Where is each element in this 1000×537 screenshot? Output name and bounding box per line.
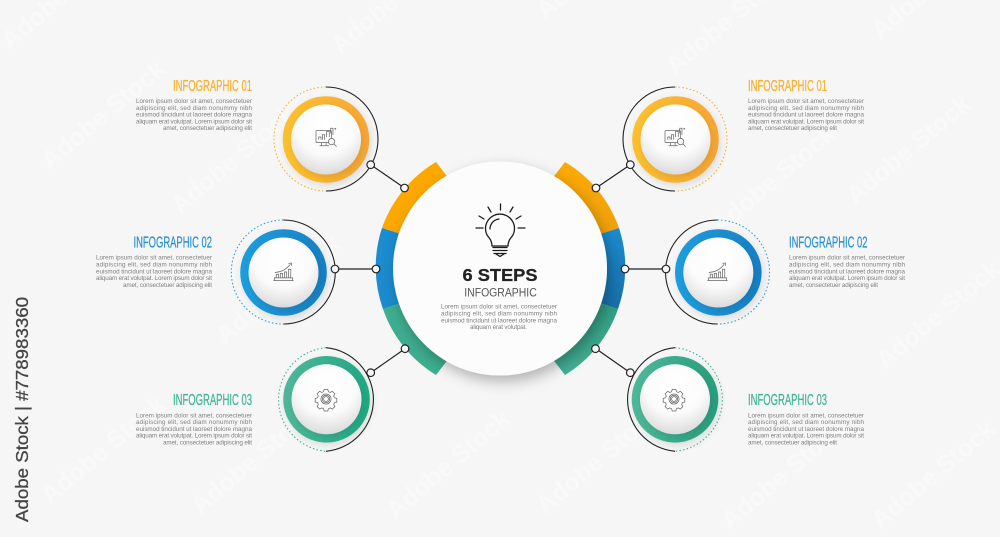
step: top left — [274, 87, 378, 191]
body text: bottom right: euismod tincidunt ut laoreet dolore magna — [748, 426, 864, 433]
watermark pattern: Adobe Stock — [531, 400, 666, 520]
body text: top right — [748, 98, 864, 132]
dotted arc — [279, 348, 326, 451]
watermark pattern: Adobe Stock — [841, 90, 976, 210]
body text: middle left: adipiscing elit, sed diam nonummy nibh — [96, 262, 212, 268]
connectors — [335, 165, 666, 373]
body text: bottom left: amet, consectetuer adipiscing elit — [163, 440, 252, 446]
ring segment: green right — [534, 297, 618, 375]
body text: middle left: Lorem ipsum dolor sit amet, consectetuer — [96, 255, 212, 262]
icon: monitor chart — [316, 128, 337, 147]
color ring — [283, 96, 369, 183]
body text: top left — [136, 98, 252, 132]
color ring — [240, 229, 327, 316]
title: top left: INFOGRAPHIC 01 — [173, 78, 252, 95]
title: middle left: INFOGRAPHIC 02 — [134, 234, 212, 252]
dotted arc — [718, 220, 770, 324]
body text: bottom left: Lorem ipsum dolor sit amet, consectetuer — [136, 412, 252, 419]
outline arc — [623, 87, 675, 191]
step: middle left — [231, 220, 335, 324]
outline arc — [326, 348, 373, 451]
color ring — [632, 356, 718, 443]
subheading: infographic: INFOGRAPHIC — [464, 288, 537, 300]
body text: top left: amet, consectetuer adipiscing elit — [163, 125, 252, 132]
dotted arc — [274, 87, 326, 191]
body text: middle left: aliquam erat volutpat. Lorem ipsum dolor sit — [96, 275, 212, 282]
outline arc — [628, 348, 675, 451]
body text: middle right — [789, 255, 905, 289]
body text: middle left: amet, consectetuer adipiscing elit — [123, 282, 212, 289]
body text: middle right: euismod tincidunt ut laoreet dolore magna — [789, 268, 905, 275]
title: top right: INFOGRAPHIC 01 — [748, 78, 827, 95]
white disc — [683, 238, 753, 308]
watermark pattern: Adobe Stock — [166, 100, 301, 220]
center body text: Lorem ipsum dolor sit amet, consectetuer — [441, 304, 557, 311]
watermark pattern: Adobe Stock — [716, 415, 851, 535]
outline arc — [666, 220, 718, 324]
title: middle right: INFOGRAPHIC 02 — [789, 234, 868, 252]
icon: growth chart — [274, 263, 294, 281]
dotted arc — [675, 87, 727, 191]
center circle — [393, 162, 607, 376]
body text: top right: adipiscing elit, sed diam nonummy nibh — [748, 105, 864, 112]
ring segment: green left — [383, 297, 467, 375]
title: bottom left: INFOGRAPHIC 03 — [173, 392, 252, 409]
watermark pattern: Adobe Stock — [36, 390, 171, 510]
white disc — [292, 364, 362, 434]
center body text: adipiscing elit, sed diam nonummy nibh — [441, 310, 557, 318]
icon: gear — [663, 389, 685, 411]
body text: top right: amet, consectetuer adipiscing elit — [748, 125, 837, 132]
body text: bottom right: aliquam erat volutpat. Lorem ipsum dolor sit — [748, 433, 864, 440]
body text: middle right: amet, consectetuer adipiscing elit — [789, 282, 878, 289]
connector nodes — [331, 161, 670, 377]
outline arc — [283, 220, 335, 324]
body text: middle right: Lorem ipsum dolor sit amet, consectetuer — [789, 255, 905, 262]
body text: middle right: adipiscing elit, sed diam nonummy nibh — [789, 262, 905, 268]
body text: bottom left: euismod tincidunt ut laoreet dolore magna — [136, 426, 252, 433]
dotted arc — [675, 348, 722, 451]
white disc — [248, 238, 318, 308]
body text: middle left: euismod tincidunt ut laoreet dolore magna — [96, 268, 212, 275]
watermark pattern: Adobe Stock — [381, 405, 516, 525]
body text: bottom left: aliquam erat volutpat. Lorem ipsum dolor sit — [136, 433, 252, 440]
body text: bottom right: amet, consectetuer adipiscing elit — [748, 440, 837, 446]
white disc — [640, 104, 710, 174]
watermark pattern: Adobe Stock — [186, 400, 321, 520]
ring segment: orange right — [534, 162, 619, 240]
watermark pattern: Adobe Stock — [866, 415, 1000, 535]
body text: top left: Lorem ipsum dolor sit amet, consectetuer — [136, 98, 252, 105]
body text: top right: aliquam erat volutpat. Lorem ipsum dolor sit — [748, 118, 864, 125]
vertical stock id: Adobe Stock | #778983360 — [12, 297, 32, 522]
color ring — [632, 96, 719, 183]
body text: top left: adipiscing elit, sed diam nonummy nibh — [136, 105, 252, 112]
body text: bottom right — [748, 412, 864, 446]
body text: bottom left — [136, 412, 252, 446]
white disc — [291, 104, 361, 174]
ring segment: blue left — [376, 228, 420, 309]
step: bottom left — [279, 348, 373, 451]
outline arc — [326, 87, 378, 191]
body text: bottom left: adipiscing elit, sed diam nonummy nibh — [136, 419, 252, 426]
dotted arc — [231, 220, 283, 324]
body text: top right: Lorem ipsum dolor sit amet, consectetuer — [748, 98, 864, 105]
body text: top left: aliquam erat volutpat. Lorem ipsum dolor sit — [136, 118, 252, 125]
heading: 6 steps: 6 STEPS — [462, 265, 538, 285]
body text: top left: euismod tincidunt ut laoreet dolore magna — [136, 112, 252, 119]
ring segment: orange left — [382, 162, 467, 240]
body text: bottom right: Lorem ipsum dolor sit amet, consectetuer — [748, 412, 864, 419]
title: bottom right: INFOGRAPHIC 03 — [748, 392, 827, 409]
watermark pattern: Adobe Stock — [706, 120, 841, 240]
white disc — [640, 364, 710, 434]
body text: bottom right: adipiscing elit, sed diam nonummy nibh — [748, 419, 864, 426]
central segmented ring — [376, 162, 625, 375]
step: bottom right — [628, 348, 722, 451]
body text: top right: euismod tincidunt ut laoreet dolore magna — [748, 112, 864, 119]
icon: gear — [315, 389, 337, 411]
ring segment: blue right — [581, 228, 625, 309]
watermark pattern: Adobe Stock — [211, 230, 346, 350]
watermark pattern: Adobe Stock — [36, 55, 171, 175]
icon: light bulb — [476, 204, 525, 256]
step: top right — [623, 87, 727, 191]
color ring — [283, 356, 370, 443]
body text: middle left — [96, 255, 212, 289]
step: middle right — [666, 220, 770, 324]
center body text — [441, 304, 557, 331]
body text: middle right: aliquam erat volutpat. Lorem ipsum dolor sit — [789, 275, 905, 282]
center body text: euismod tincidunt ut laoreet dolore magna — [441, 317, 557, 324]
color ring — [675, 229, 762, 316]
icon: growth chart — [708, 263, 728, 281]
icon: monitor chart — [665, 128, 686, 147]
center body text: aliquam erat volutpat. — [470, 324, 527, 331]
